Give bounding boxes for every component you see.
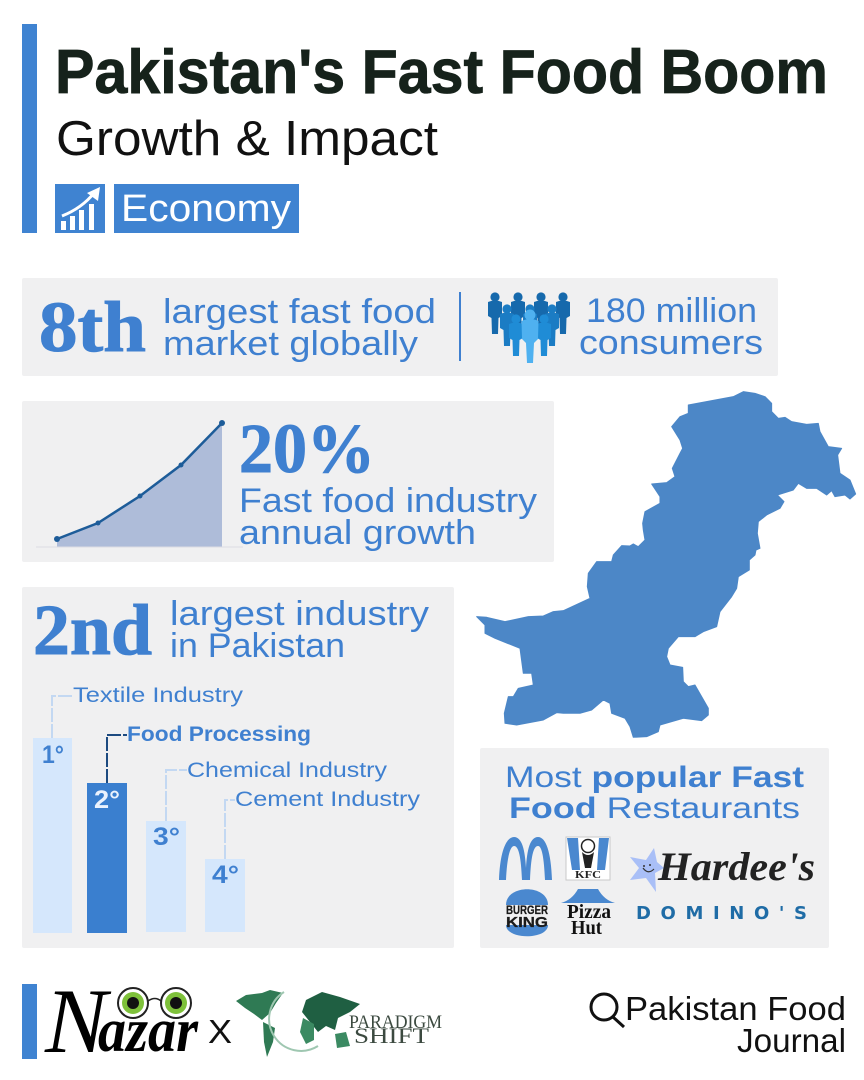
map of Pakistan bbox=[477, 392, 856, 737]
icon: economy growth chart bbox=[55, 184, 105, 233]
text: collaboration X: X bbox=[208, 1013, 232, 1050]
stat: 20%: 20% bbox=[239, 411, 375, 488]
logo: Burger King: BURGER bbox=[506, 903, 548, 917]
logo: Domino's: DOMINO'S bbox=[636, 903, 807, 924]
icon: crowd of people bbox=[488, 292, 570, 363]
logo: Pizza Hut: Hut bbox=[571, 917, 602, 939]
header accent bar bbox=[22, 24, 37, 233]
stat: 8th: 8th bbox=[39, 287, 146, 367]
logo: Burger King: KING bbox=[506, 914, 548, 931]
panel: market rank and consumers bbox=[22, 278, 778, 376]
heading: most popular: Most popular Fast bbox=[505, 761, 804, 794]
bar: food processing: 2° bbox=[94, 786, 120, 814]
heading: most popular: Food Restaurants bbox=[509, 792, 800, 825]
source text: Pakistan Food bbox=[625, 990, 846, 1027]
text: largest fast food market: largest fast food bbox=[163, 293, 436, 331]
text: largest fast food market: market globally bbox=[163, 325, 418, 363]
logo: Paradigm Shift: SHIFT bbox=[354, 1023, 430, 1048]
subtitle: Growth & Impact bbox=[56, 112, 438, 166]
logo: Nazar bbox=[44, 970, 199, 1072]
bar: textile bbox=[33, 684, 244, 933]
bar: cement: 4° bbox=[212, 861, 239, 889]
text: largest industry in Pakistan: in Pakistan bbox=[170, 627, 345, 665]
logo: Burger King bbox=[506, 889, 548, 936]
bar: chemical: 3° bbox=[153, 823, 180, 851]
text: largest industry in Pakistan bbox=[170, 595, 429, 665]
heading: most popular bbox=[505, 761, 804, 825]
title: Pakistan's Fast Food Boom bbox=[55, 38, 828, 107]
ranking bar chart bbox=[33, 684, 421, 933]
logo: Paradigm Shift: PARADIGM bbox=[349, 1012, 442, 1033]
text: annual growth caption bbox=[239, 482, 537, 552]
footer bbox=[22, 970, 846, 1072]
logo: Pizza Hut bbox=[561, 889, 615, 939]
bar: textile: Textile Industry bbox=[73, 684, 244, 707]
text: largest industry in Pakistan: largest industry bbox=[170, 595, 429, 633]
text: annual growth caption: annual growth bbox=[239, 514, 476, 552]
bar: textile: 1° bbox=[42, 741, 64, 769]
category tag: Economy bbox=[121, 188, 291, 230]
logo: Pizza Hut: Pizza bbox=[567, 901, 611, 923]
bar: food processing: Food Processing bbox=[127, 723, 311, 746]
bar: cement bbox=[205, 788, 421, 932]
text: 180 million consumers bbox=[579, 292, 763, 362]
icon: search bbox=[591, 994, 624, 1027]
source text bbox=[625, 990, 846, 1059]
panel: annual growth bbox=[22, 401, 554, 562]
area line chart bbox=[36, 420, 243, 547]
header block bbox=[22, 24, 828, 233]
logo: Nazar: N bbox=[44, 970, 112, 1072]
text: 180 million consumers: 180 million bbox=[586, 292, 757, 330]
text: annual growth caption: Fast food industry bbox=[239, 482, 537, 520]
bar: chemical bbox=[146, 759, 388, 932]
logo: KFC bbox=[566, 837, 610, 881]
logo: Paradigm Shift bbox=[236, 990, 442, 1057]
logo: KFC: KFC bbox=[575, 870, 601, 881]
bar: cement: Cement Industry bbox=[235, 788, 421, 811]
logo: Nazar: azar bbox=[98, 997, 199, 1065]
footer accent bar bbox=[22, 984, 37, 1059]
logo: McDonald's bbox=[499, 837, 552, 880]
bar: chemical: Chemical Industry bbox=[187, 759, 388, 782]
stat: 2nd: 2nd bbox=[33, 590, 152, 670]
panel: second largest industry bbox=[22, 587, 454, 948]
logo: Hardee's: Hardee's bbox=[657, 844, 815, 889]
panel: popular restaurants bbox=[480, 748, 829, 948]
source text: Journal bbox=[737, 1022, 846, 1059]
text: largest fast food market bbox=[163, 293, 436, 363]
text: 180 million consumers: consumers bbox=[579, 324, 763, 362]
bar: food processing bbox=[87, 723, 311, 933]
